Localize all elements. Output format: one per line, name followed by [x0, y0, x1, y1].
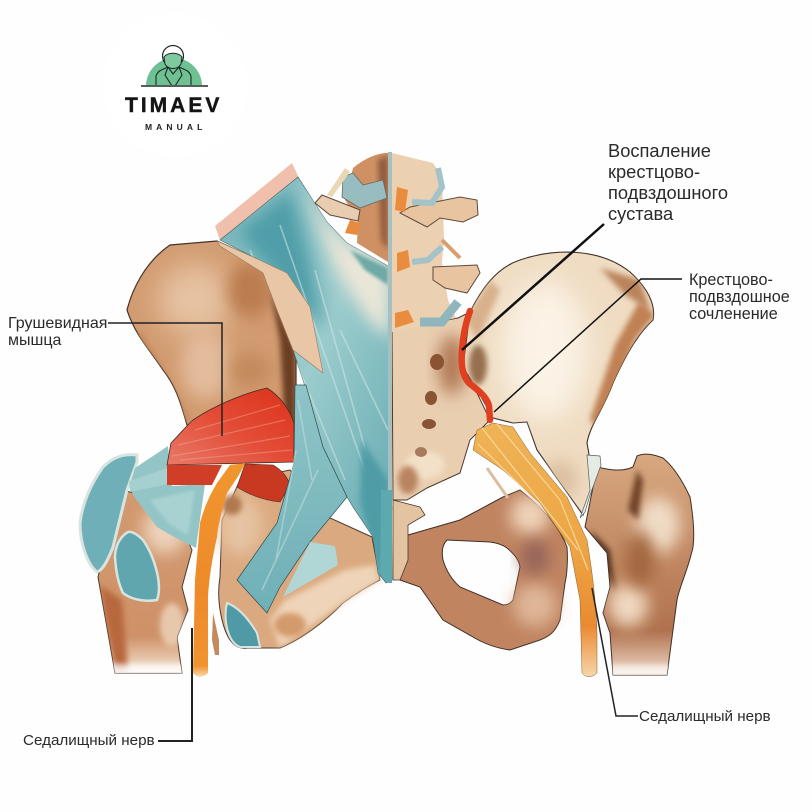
leader line: piriformis: [108, 323, 222, 436]
right coccyx segments: [393, 500, 425, 580]
left ischial blue oval: [226, 603, 260, 647]
left sciatic nerve: [193, 463, 245, 677]
right femur: [585, 454, 694, 680]
left tendons: [129, 446, 205, 548]
label: left sciatic nerve: Седалищный нерв: [23, 732, 155, 749]
left blue fan: [283, 542, 338, 597]
logo: Timaev Manual: [103, 13, 247, 157]
label: piriformis muscle: Грушевидная: [8, 315, 107, 332]
right hip joint cartilage: [580, 455, 601, 518]
left ilium bone: [127, 241, 296, 440]
icon: doctor on green semicircle: [141, 46, 208, 87]
piriformis muscle (red): [167, 388, 294, 502]
left ischium and pubic bone: [218, 470, 380, 648]
anatomical illustration: pelvis posterior view: [80, 152, 694, 684]
right sacrum bone: [392, 312, 490, 500]
left femur: [98, 490, 192, 684]
inflamed sacroiliac joint (red line): [462, 311, 490, 420]
sacral foramina: [415, 354, 444, 457]
left ilium flap: [217, 241, 323, 373]
label: inflammation of sacroiliac joint: сустава: [608, 203, 674, 224]
right sciatic nerve: [473, 423, 597, 677]
left half of lumbar spine: [315, 153, 388, 285]
label: sacroiliac articulation: Крестцово-: [689, 271, 773, 289]
ligament fringe (pink): [215, 163, 299, 240]
leader line: sacroiliac articulation: [494, 279, 682, 412]
right ilium bone: [463, 252, 655, 515]
label: inflammation of sacroiliac joint: подвздошного: [608, 182, 728, 203]
logo wordmark: TIMAEV: [125, 94, 222, 117]
left lower ligament band: [237, 385, 347, 613]
right pubic and ischial bone: [393, 490, 567, 650]
label: right sciatic nerve: Седалищный нерв: [639, 708, 771, 725]
leader line: right sciatic nerve: [592, 588, 638, 716]
leader line: inflammation: [462, 224, 604, 350]
label: piriformis muscle: мышца: [8, 332, 62, 349]
label: inflammation of sacroiliac joint: крестцово-: [608, 161, 700, 182]
sacrotuberous and sacroiliac ligaments (blue): [220, 177, 392, 583]
label: inflammation of sacroiliac joint: Воспаление: [608, 140, 711, 161]
right lower blue strip: [380, 490, 392, 583]
spine centre line: [388, 152, 392, 500]
label: sacroiliac articulation: подвздошное: [689, 288, 790, 306]
right half of lumbar spine: [392, 153, 480, 332]
label: sacroiliac articulation: сочленение: [689, 305, 778, 323]
left femur blue oval: [115, 532, 159, 601]
left greater trochanter blue cap: [80, 455, 137, 572]
logo subtitle: MANUAL: [145, 122, 206, 132]
leader line: left sciatic nerve: [158, 628, 192, 741]
